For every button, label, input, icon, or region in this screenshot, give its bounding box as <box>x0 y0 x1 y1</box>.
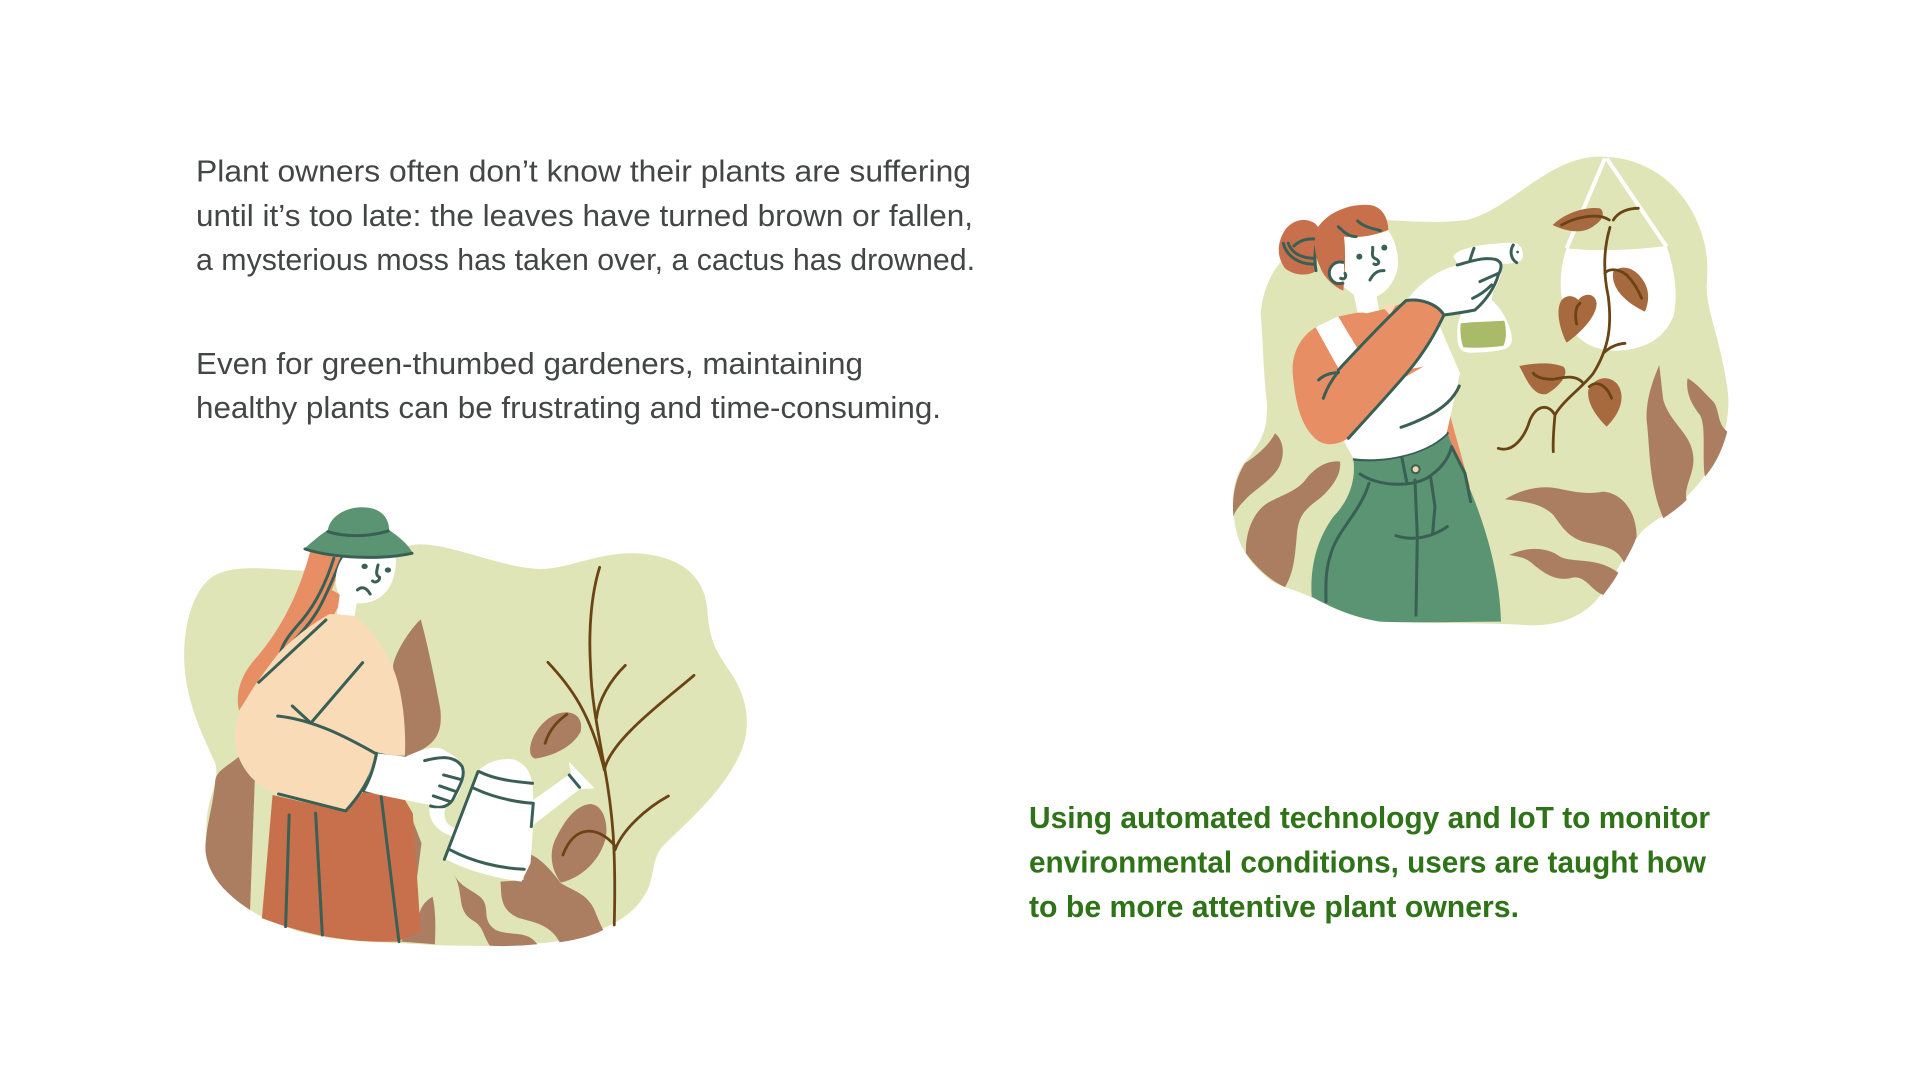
skirt stitching <box>1326 433 1471 615</box>
illustration: woman with spray bottle <box>1233 157 1728 625</box>
hat <box>304 507 413 557</box>
skirt <box>1311 433 1501 622</box>
background blob <box>1233 157 1728 625</box>
text block: solution statement: environmental conditions, users are taught how <box>1029 844 1707 880</box>
skirt button <box>1412 465 1420 473</box>
short hair <box>1315 205 1388 291</box>
long hair <box>238 552 344 711</box>
bare plant stems <box>545 567 694 925</box>
finger lines <box>363 754 463 807</box>
white top <box>1317 310 1460 459</box>
raised arm and hand <box>1319 248 1502 441</box>
sweater lines <box>259 620 406 811</box>
hanging plant leaves <box>1519 208 1648 427</box>
white shoulder stripe <box>1316 317 1358 370</box>
face and neck <box>336 557 396 617</box>
text block: solution statement <box>1029 800 1710 924</box>
skirt pleats <box>286 797 399 942</box>
ear and hair lines <box>1329 221 1381 284</box>
hand <box>363 748 464 806</box>
text block: solution statement: Using automated technology and IoT to monitor <box>1029 800 1710 835</box>
hair bun <box>1279 220 1319 275</box>
hanging pot <box>1561 158 1676 351</box>
hair bun lines <box>1283 233 1319 271</box>
facial features <box>358 564 391 594</box>
orange sleeve left shoulder <box>1293 327 1423 444</box>
text block: problem statement <box>196 154 975 277</box>
text block: problem statement: a mysterious moss has taken over, a cactus has drowned. <box>196 242 975 277</box>
text block: gardeners frustration: Even for green-thumbed gardeners, maintaining <box>196 346 863 381</box>
top folds <box>1401 386 1459 427</box>
peach collar <box>1382 303 1397 315</box>
back of arm hair panel <box>1447 403 1470 493</box>
spray bottle <box>1453 243 1523 353</box>
background blob <box>184 544 747 946</box>
orange shirt front <box>1338 302 1405 350</box>
text block: solution statement: to be more attentive plant owners. <box>1029 889 1519 924</box>
skirt <box>262 792 421 942</box>
text block: problem statement: Plant owners often don’t know their plants are suffering <box>196 154 971 188</box>
text block: problem statement: until it’s too late: the leaves have turned brown or fallen, <box>196 198 973 233</box>
illustration: woman with watering can <box>184 507 747 946</box>
hair strands <box>280 558 334 653</box>
watering can <box>429 759 594 882</box>
brown foliage <box>205 619 606 946</box>
sweater <box>235 614 405 812</box>
text block: gardeners frustration <box>196 346 941 425</box>
plant vine <box>1498 208 1642 452</box>
text block: gardeners frustration: healthy plants can be frustrating and time-consuming. <box>196 390 941 425</box>
brown foliage <box>1233 365 1727 595</box>
neck and face <box>1343 228 1398 315</box>
facial features <box>1356 245 1387 280</box>
